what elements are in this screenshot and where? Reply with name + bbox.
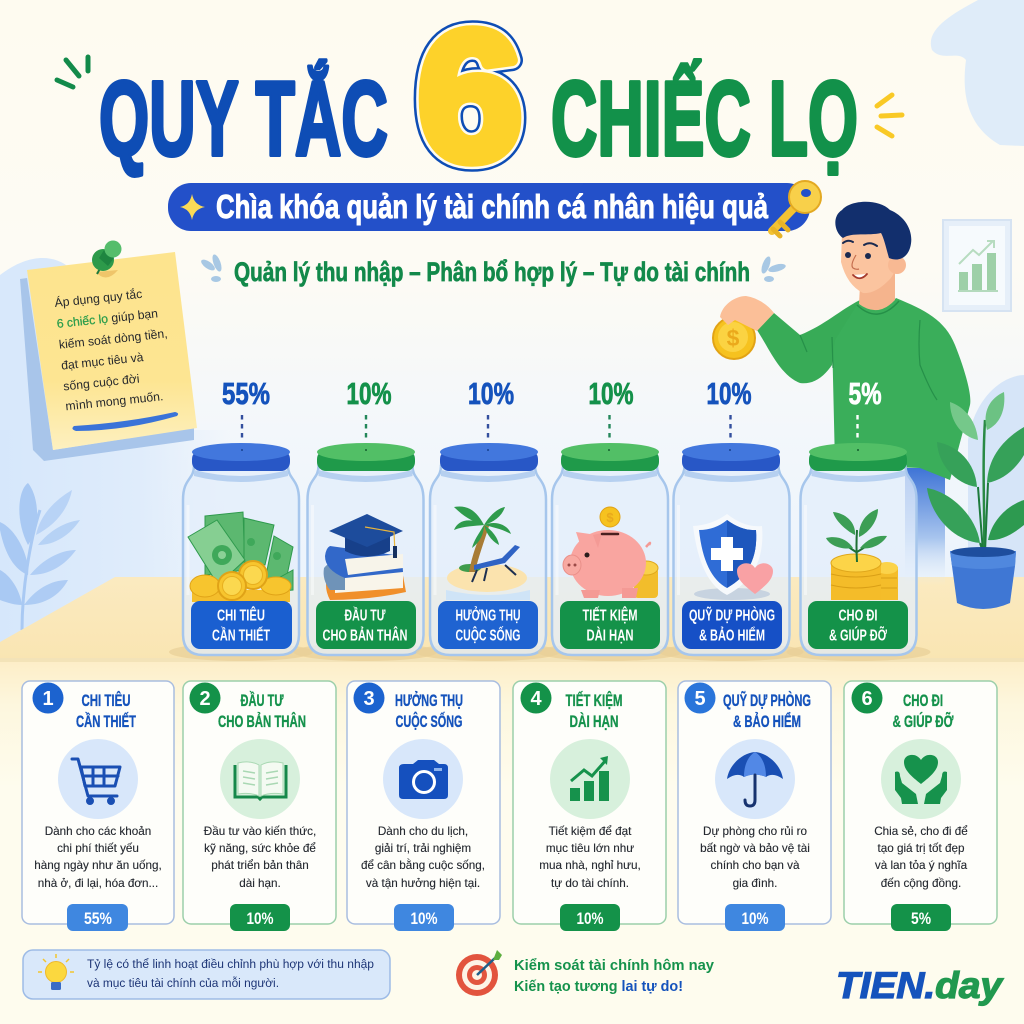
jar 6: giving: & GIÚP ĐỠ [829, 624, 887, 644]
card 2: CHO BẢN THÂN [218, 712, 306, 731]
card 1: nhà ở, đi lại, hóa đơn... [38, 877, 158, 890]
card 5: 10% [742, 909, 768, 928]
note text: mình mong muốn. [65, 389, 164, 413]
card 2: 2 [199, 688, 211, 710]
card 1: chi phí thiết yếu [57, 842, 139, 855]
card 2 [183, 681, 336, 931]
card 5: bất ngờ và bảo vệ tài [700, 842, 810, 855]
footer note: Tỷ lệ có thể linh hoạt điều chỉnh phù hợp với thu nhập [87, 957, 374, 971]
logo: TIEN.day [836, 965, 1005, 1006]
jar percentages: 55% [222, 376, 270, 411]
jar 4: long-term savings [538, 443, 682, 661]
card 4: DÀI HẠN [570, 712, 618, 731]
icon: target [456, 950, 502, 996]
tagline drops left [199, 253, 223, 282]
card 6: đến cộng đồng. [881, 877, 961, 890]
tagline: Quản lý thu nhập – Phân bổ hợp lý – Tự do tài chính [234, 257, 750, 287]
card 4: TIẾT KIỆM [566, 691, 622, 710]
card 4: Tiết kiệm để đạt [549, 825, 632, 838]
sparks left [57, 57, 88, 87]
icon: key [772, 181, 821, 236]
coin in hand [713, 317, 755, 359]
card 2: 10% [246, 909, 274, 928]
card 4: 10% [576, 909, 604, 928]
pushpin [92, 240, 122, 278]
jar 2: self investment: CHO BẢN THÂN [322, 626, 408, 644]
card 4: mua nhà, nghỉ hưu, [539, 859, 641, 872]
jar 1: essential spending: CẦN THIẾT [212, 626, 270, 644]
jar percentages: 10% [706, 376, 752, 411]
sparks right [877, 95, 902, 136]
note underline [72, 412, 178, 431]
footer note [23, 950, 390, 999]
card 1: Dành cho các khoản [45, 825, 151, 838]
piggy bank: $ [606, 510, 614, 525]
jar 4: long-term savings: DÀI HẠN [586, 626, 634, 644]
card 5: QUỸ DỰ PHÒNG [723, 690, 811, 710]
shield and heart [693, 514, 773, 600]
card 1 [22, 681, 174, 931]
decorative pale leaves, left [0, 483, 80, 630]
card 6 [844, 681, 997, 931]
jar 1: essential spending [169, 443, 313, 661]
card 4: mục tiêu lớn như [546, 842, 634, 855]
wall chart picture [943, 220, 1011, 311]
card 4: 4 [530, 688, 542, 710]
footer slogan [514, 957, 715, 995]
card 6: và lan tỏa ý nghĩa [875, 859, 968, 872]
card 4 [513, 681, 666, 931]
piggy bank [563, 507, 658, 598]
card 1: 55% [84, 909, 112, 928]
card 6: & GIÚP ĐỠ [892, 711, 954, 731]
table surface [0, 577, 1024, 662]
note text: sống cuộc đời [63, 372, 140, 394]
card 3: Dành cho du lịch, [378, 825, 468, 838]
card 1: CẦN THIẾT [76, 712, 136, 731]
card 2: phát triển bản thân [211, 859, 309, 872]
card 1: 1 [42, 688, 54, 710]
icon: book [235, 762, 286, 799]
icon: growth chart [570, 756, 609, 801]
potted plant [927, 392, 1024, 609]
eyes [845, 252, 851, 258]
hair [835, 202, 911, 260]
card 5: gia đình. [733, 877, 777, 890]
subtitle pill: Chìa khóa quản lý tài chính cá nhân hiệu quả [216, 188, 768, 225]
lower panel background [0, 662, 1024, 1024]
card 3: để cân bằng cuộc sống, [361, 859, 485, 872]
sticky note [20, 240, 197, 461]
card 5 [678, 681, 831, 931]
jar 5: emergency and insurance: & BẢO HIỂM [699, 626, 765, 644]
note text: kiếm soát dòng tiền, [58, 326, 168, 352]
footer slogan: Kiểm soát tài chính hôm nay [514, 957, 715, 974]
island [446, 506, 530, 600]
arm [757, 300, 860, 383]
jar 5: emergency and insurance [660, 443, 804, 661]
title: QUY TẮC [99, 59, 388, 178]
coins and sprout [826, 509, 898, 600]
footer slogan: Kiến tạo tương lai tự do! [514, 978, 683, 995]
hand [720, 296, 774, 331]
jar 3: enjoy life: HƯỞNG THỤ [456, 606, 520, 624]
jar 2: self investment: ĐẦU TƯ [344, 606, 386, 624]
jar percentages: 10% [588, 376, 634, 411]
card 5: & BẢO HIỂM [733, 712, 801, 731]
books and cap [324, 514, 406, 600]
card 6: CHO ĐI [903, 691, 943, 710]
card 3: HƯỞNG THỤ [395, 691, 463, 710]
money [188, 512, 293, 602]
neck [859, 270, 895, 310]
card 2: Đầu tư vào kiến thức, [204, 825, 316, 838]
card 6: Chia sẻ, cho đi để [874, 825, 968, 838]
jar percentages: 10% [346, 376, 392, 411]
card 2: ĐẦU TƯ [240, 691, 284, 710]
card 3: và tận hưởng hiện tại. [366, 877, 480, 890]
card 3: giải trí, trải nghiệm [375, 842, 471, 855]
card 3 [347, 681, 500, 931]
note text: Áp dụng quy tắc [54, 286, 143, 310]
icon: cart [72, 759, 120, 804]
man illustration [713, 202, 970, 585]
tagline drops right [760, 255, 787, 282]
icon: umbrella [727, 752, 783, 806]
jar 1: essential spending: CHI TIÊU [217, 606, 265, 624]
title [99, 0, 522, 198]
icon: hands with heart [895, 755, 947, 804]
card 6: 5% [911, 909, 931, 928]
card 3: 3 [363, 688, 375, 710]
face [841, 228, 897, 293]
jar percentages: 10% [468, 376, 514, 411]
card 5: 5 [694, 688, 706, 710]
jar 3: enjoy life: CUỘC SỐNG [456, 624, 520, 644]
card 5: Dự phòng cho rủi ro [703, 825, 807, 838]
card 1: hàng ngày như ăn uống, [34, 859, 162, 872]
jar 5: emergency and insurance: QUỸ DỰ PHÒNG [689, 604, 775, 624]
jar 6: giving: CHO ĐI [838, 608, 878, 624]
torso [832, 298, 970, 480]
man illustration: $ [727, 325, 740, 351]
subtitle pill [168, 183, 810, 231]
card 6: 6 [861, 688, 873, 710]
pants [905, 468, 945, 585]
card 2: kỹ năng, sức khỏe để [204, 842, 316, 855]
card 2: dài hạn. [239, 877, 281, 890]
icon: light bulb [38, 954, 74, 990]
jar 3: enjoy life [416, 443, 560, 661]
card 5: chính cho bạn và [710, 859, 800, 872]
jar percentages [222, 376, 882, 439]
jar 2: self investment [294, 443, 438, 661]
jar 4: long-term savings: TIẾT KIỆM [582, 606, 638, 624]
jar 6: giving [786, 443, 930, 661]
card 4: tự do tài chính. [551, 877, 629, 890]
note text [54, 284, 175, 413]
note text: 6 chiếc lọ giúp bạn [56, 306, 159, 331]
card 3: 10% [410, 909, 438, 928]
jar percentages: 5% [848, 376, 882, 411]
icon: camera [399, 760, 448, 799]
card 6: tạo giá trị tốt đẹp [877, 842, 965, 855]
note text: đạt mục tiêu và [60, 350, 144, 373]
footer note: và mục tiêu tài chính của mỗi người. [87, 975, 279, 990]
card 3: CUỘC SỐNG [396, 711, 462, 731]
card 1: CHI TIÊU [82, 691, 130, 710]
